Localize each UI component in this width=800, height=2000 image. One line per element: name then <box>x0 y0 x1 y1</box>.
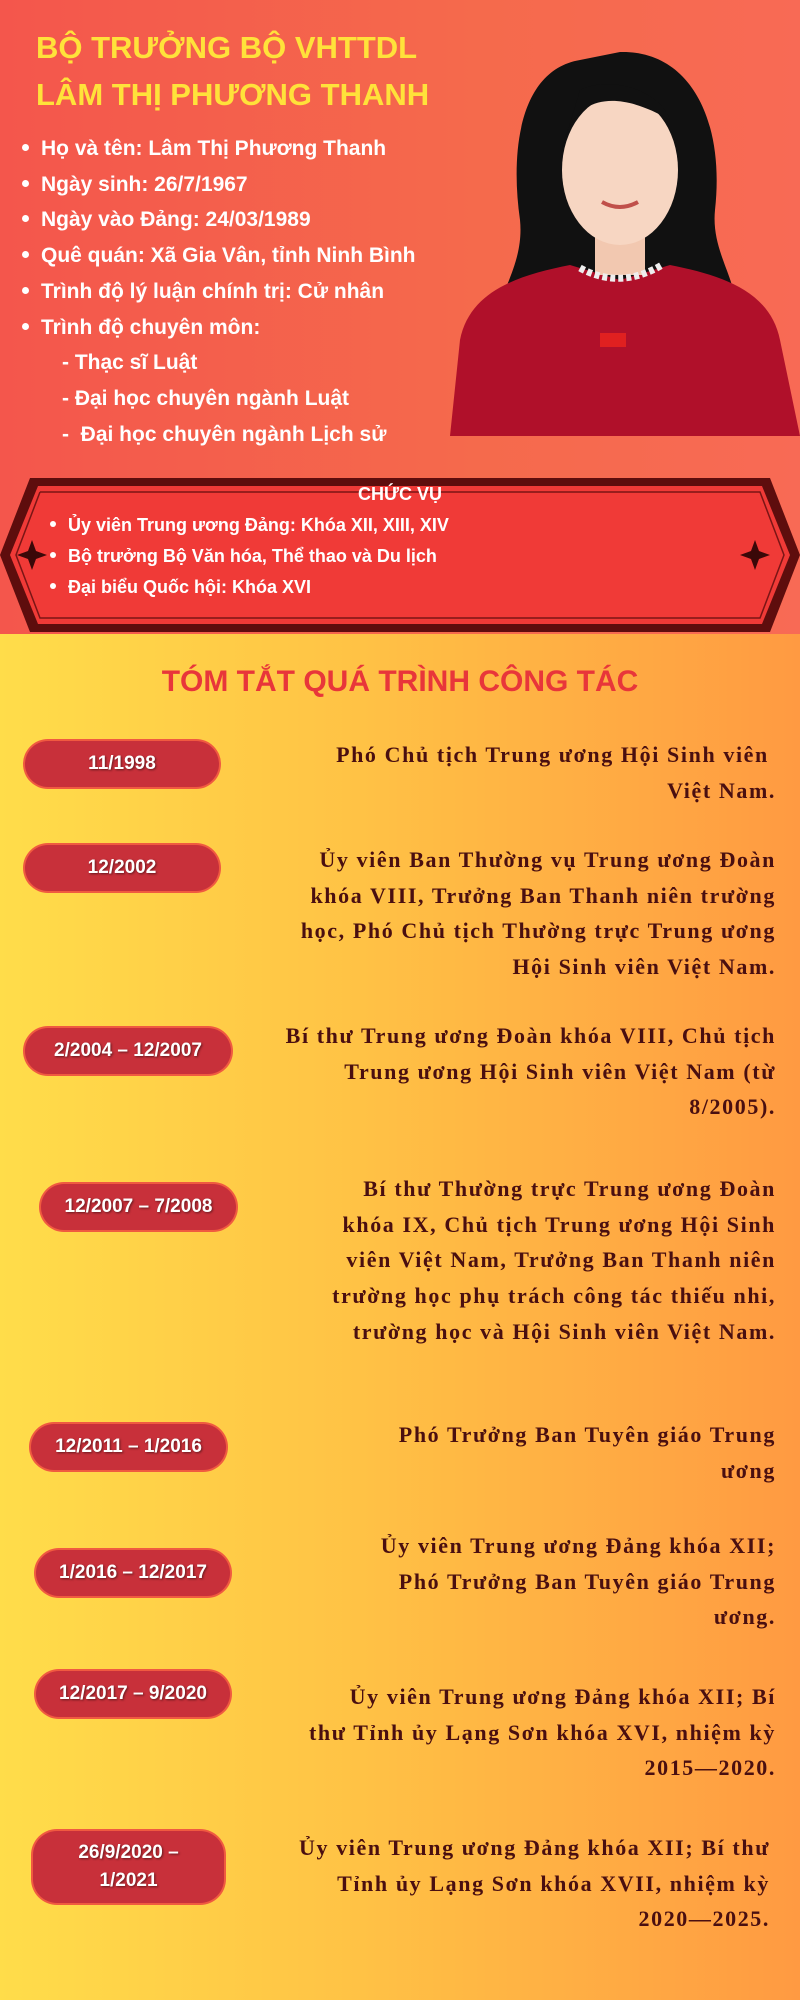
personal info list: - Thạc sĩ Luật <box>62 351 197 374</box>
timeline item 7: thư Tỉnh ủy Lạng Sơn khóa XVI, nhiệm kỳ <box>309 1720 776 1745</box>
timeline item 3: 8/2005). <box>689 1094 776 1119</box>
timeline item 4: Bí thư Thường trực Trung ương Đoàn <box>363 1176 776 1201</box>
timeline item 7 <box>34 1669 776 1780</box>
timeline item 6: Phó Trưởng Ban Tuyên giáo Trung <box>399 1569 776 1594</box>
personal info list: Quê quán: Xã Gia Vân, tỉnh Ninh Bình <box>41 244 416 267</box>
timeline item 8: Ủy viên Trung ương Đảng khóa XII; Bí thư <box>299 1835 770 1860</box>
panel: positions (chức vụ): Bộ trưởng Bộ Văn hóa, Thể thao và Du lịch <box>68 546 437 566</box>
title <box>36 30 429 112</box>
timeline item 8: 2020—2025. <box>638 1906 770 1931</box>
personal info list: Ngày sinh: 26/7/1967 <box>41 173 248 196</box>
background: top red section <box>0 0 800 634</box>
title: LÂM THỊ PHƯƠNG THANH <box>36 77 429 112</box>
personal info list: - Đại học chuyên ngành Lịch sử <box>62 423 386 446</box>
personal info list: Trình độ chuyên môn: <box>41 316 260 339</box>
timeline item 8: 1/2021 <box>99 1870 158 1891</box>
personal info list <box>22 137 416 446</box>
timeline item 3: Trung ương Hội Sinh viên Việt Nam (từ <box>344 1059 776 1084</box>
timeline item 4: trường học và Hội Sinh viên Việt Nam. <box>353 1319 776 1344</box>
timeline item 4: viên Việt Nam, Trưởng Ban Thanh niên <box>346 1247 776 1272</box>
timeline item 4: khóa IX, Chủ tịch Trung ương Hội Sinh <box>343 1212 776 1237</box>
timeline item 5: 12/2011 – 1/2016 <box>55 1436 202 1457</box>
timeline item 2 <box>23 843 776 979</box>
timeline item 5: ương <box>721 1458 776 1483</box>
panel: positions (chức vụ): Đại biểu Quốc hội: Khóa XVI <box>68 577 311 597</box>
portrait <box>450 52 800 436</box>
timeline item 7: 2015—2020. <box>644 1755 776 1780</box>
timeline item 6: Ủy viên Trung ương Đảng khóa XII; <box>381 1533 776 1558</box>
timeline item 3 <box>23 1023 776 1119</box>
timeline item 6: 1/2016 – 12/2017 <box>59 1562 207 1583</box>
timeline item 3: 2/2004 – 12/2007 <box>54 1040 202 1061</box>
timeline item 2: học, Phó Chủ tịch Thường trực Trung ương <box>301 918 776 943</box>
timeline item 2: 12/2002 <box>88 857 156 878</box>
personal info list: - Đại học chuyên ngành Luật <box>62 387 349 410</box>
timeline item 1: Phó Chủ tịch Trung ương Hội Sinh viên <box>336 742 769 767</box>
timeline item 6 <box>34 1533 776 1629</box>
timeline item 4: trường học phụ trách công tác thiếu nhi, <box>332 1283 776 1308</box>
timeline item 6: ương. <box>714 1604 776 1629</box>
title: BỘ TRƯỞNG BỘ VHTTDL <box>36 30 417 65</box>
timeline item 8 <box>31 1829 770 1931</box>
timeline item 7: 12/2017 – 9/2020 <box>59 1683 207 1704</box>
panel: positions (chức vụ): CHỨC VỤ <box>358 484 442 504</box>
panel: positions (chức vụ): Ủy viên Trung ương Đảng: Khóa XII, XIII, XIV <box>68 515 449 535</box>
panel: positions (chức vụ) <box>0 478 800 632</box>
timeline item 1: Việt Nam. <box>667 778 776 803</box>
timeline item 8: Tỉnh ủy Lạng Sơn khóa XVII, nhiệm kỳ <box>337 1871 770 1896</box>
personal info list: Họ và tên: Lâm Thị Phương Thanh <box>41 137 386 160</box>
timeline item 5 <box>29 1422 776 1483</box>
personal info list: Trình độ lý luận chính trị: Cử nhân <box>41 280 384 303</box>
timeline item 4 <box>39 1176 776 1344</box>
timeline item 2: Ủy viên Ban Thường vụ Trung ương Đoàn <box>319 847 776 872</box>
timeline item 5: Phó Trưởng Ban Tuyên giáo Trung <box>399 1422 776 1447</box>
timeline item 1: 11/1998 <box>88 753 156 774</box>
timeline item 1 <box>23 739 776 803</box>
personal info list: Ngày vào Đảng: 24/03/1989 <box>41 208 311 231</box>
timeline item 4: 12/2007 – 7/2008 <box>65 1196 212 1217</box>
timeline item 2: Hội Sinh viên Việt Nam. <box>512 954 776 979</box>
timeline item 8: 26/9/2020 – <box>78 1842 179 1863</box>
section heading: TÓM TẮT QUÁ TRÌNH CÔNG TÁC <box>162 665 638 698</box>
timeline item 7: Ủy viên Trung ương Đảng khóa XII; Bí <box>350 1684 776 1709</box>
timeline item 3: Bí thư Trung ương Đoàn khóa VIII, Chủ tịch <box>286 1023 776 1048</box>
timeline item 2: khóa VIII, Trưởng Ban Thanh niên trường <box>310 883 776 908</box>
